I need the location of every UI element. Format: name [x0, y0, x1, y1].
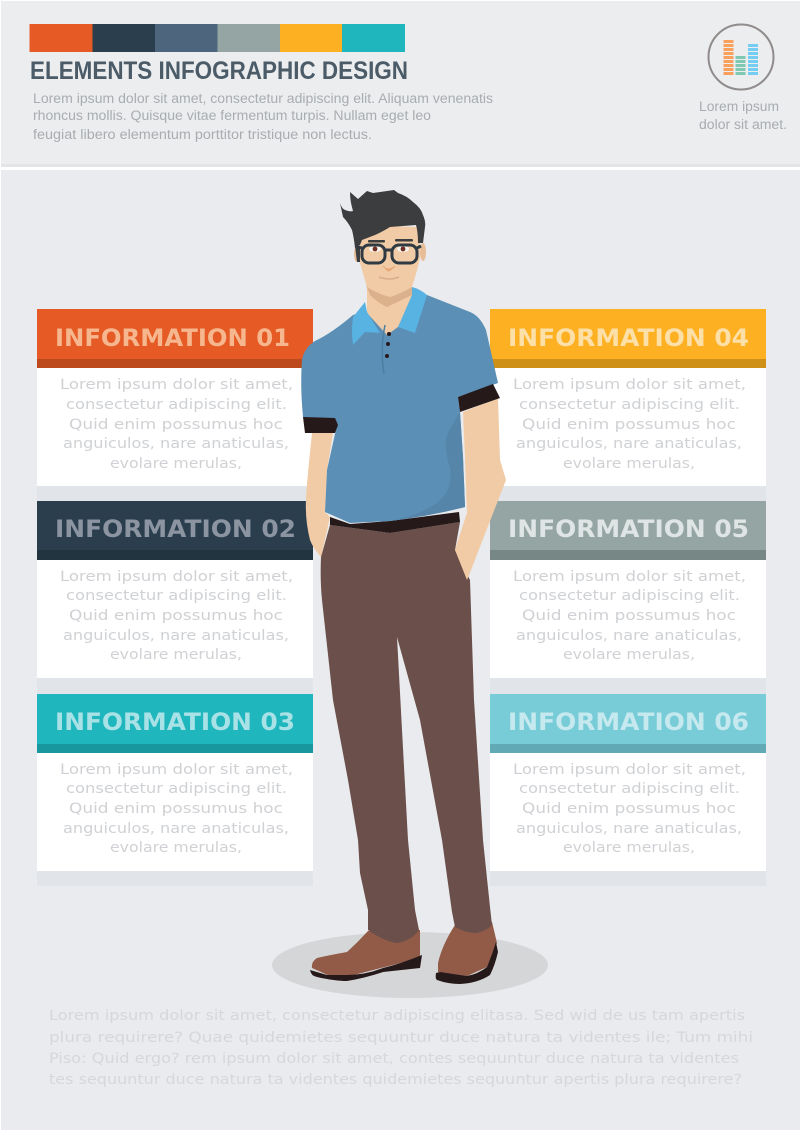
- right hand over pocket: [455, 513, 480, 580]
- panel: information 01: Quid enim possumus hoc: [69, 417, 283, 433]
- panel: information 04: INFORMATION 04: [508, 324, 749, 352]
- panel: information 02: evolare merulas,: [110, 647, 242, 663]
- icon caption: [699, 99, 787, 132]
- panel: information 05: Lorem ipsum dolor sit amet,: [513, 569, 746, 585]
- panel: information 02: anguiculos, nare anaticulas,: [63, 628, 289, 644]
- panel: information 04: evolare merulas,: [563, 456, 695, 472]
- glasses: [357, 245, 421, 263]
- panel: information 02: INFORMATION 02: [55, 515, 296, 543]
- right arm: [455, 398, 506, 580]
- footer text: plura requirere? Quae quidemietes sequuntur duce natura ta videntes ile; Tum mihi: [49, 1030, 753, 1046]
- panel: information 01: [37, 309, 313, 501]
- panel: information 04: [490, 309, 766, 501]
- collar left: [352, 302, 380, 345]
- right shoe: [438, 922, 497, 976]
- panel: information 02: Quid enim possumus hoc: [69, 608, 283, 624]
- shirt: [301, 295, 498, 523]
- panel: information 01: consectetur adipiscing elit.: [66, 397, 287, 413]
- trousers: [321, 522, 492, 943]
- panel: information 03: Quid enim possumus hoc: [69, 801, 283, 817]
- panel: information 06: anguiculos, nare anaticulas,: [516, 821, 742, 837]
- icon: equalizer badge: [708, 24, 774, 90]
- left sleeve band: [303, 417, 338, 433]
- neck: [367, 280, 412, 335]
- panel: information 02: [37, 501, 313, 694]
- panel: information 06: Quid enim possumus hoc: [522, 801, 736, 817]
- intro text: rhoncus mollis. Quisque vitae fermentum turpis. Nullam eget leo: [33, 108, 431, 123]
- illustration: standing man: [301, 190, 506, 984]
- panel: information 01: anguiculos, nare anaticulas,: [63, 436, 289, 452]
- placket and buttons: [382, 325, 391, 374]
- shirt shadow: [390, 412, 465, 521]
- hair: [340, 190, 425, 248]
- head: [358, 226, 420, 297]
- panel: information 01: Lorem ipsum dolor sit amet,: [60, 377, 293, 393]
- panel: information 05: Quid enim possumus hoc: [522, 608, 736, 624]
- right sleeve band: [458, 384, 500, 412]
- panel: information 06: Lorem ipsum dolor sit amet,: [513, 762, 746, 778]
- intro text: [33, 91, 493, 142]
- side hair: [355, 246, 360, 262]
- panel: information 03: INFORMATION 03: [55, 708, 295, 736]
- panel: information 05: INFORMATION 05: [508, 515, 749, 543]
- panel: information 02: Lorem ipsum dolor sit amet,: [60, 569, 293, 585]
- left shoe: [312, 930, 420, 976]
- panel: information 05: evolare merulas,: [563, 647, 695, 663]
- panel: information 03: anguiculos, nare anaticulas,: [63, 821, 289, 837]
- panel: information 04: Lorem ipsum dolor sit amet,: [513, 377, 746, 393]
- footer text: Piso: Quid ergo? rem ipsum dolor sit amet, contes sequuntur duce natura ta videntes: [49, 1051, 739, 1067]
- panel: information 06: evolare merulas,: [563, 840, 695, 856]
- ears: [354, 243, 426, 262]
- panel: information 03: Lorem ipsum dolor sit amet,: [60, 762, 293, 778]
- colour stripe bar: [30, 24, 405, 52]
- icon caption: Lorem ipsum: [699, 99, 779, 114]
- intro text: feugiat libero elementum porttitor tristique non lectus.: [33, 127, 372, 142]
- panel: information 05: anguiculos, nare anaticulas,: [516, 628, 742, 644]
- footer text: tes sequuntur duce natura ta videntes quidemietes sequuntur apertis plura requirere?: [49, 1072, 742, 1088]
- panel: information 01: INFORMATION 01: [55, 324, 290, 352]
- neck shadow: [366, 285, 412, 307]
- eyebrows: [368, 239, 413, 242]
- panel: information 03: evolare merulas,: [110, 840, 242, 856]
- belt: [330, 512, 460, 533]
- nose: [383, 266, 395, 271]
- panel: information 02: consectetur adipiscing elit.: [66, 588, 287, 604]
- footer text: [49, 1008, 753, 1088]
- panel: information 06: INFORMATION 06: [508, 708, 749, 736]
- panel: information 01: evolare merulas,: [110, 456, 242, 472]
- panel: information 04: consectetur adipiscing elit.: [519, 397, 740, 413]
- mouth: [379, 277, 399, 279]
- collar right: [398, 287, 427, 333]
- panel: information 06: consectetur adipiscing elit.: [519, 781, 740, 797]
- panel: information 04: Quid enim possumus hoc: [522, 417, 736, 433]
- icon caption: dolor sit amet.: [699, 117, 787, 132]
- eyes: [369, 246, 409, 252]
- panel: information 03: consectetur adipiscing elit.: [66, 781, 287, 797]
- panel: information 04: anguiculos, nare anaticulas,: [516, 436, 742, 452]
- ground shadow ellipse: [272, 932, 548, 998]
- panel: information 05: [490, 501, 766, 694]
- panel: information 05: consectetur adipiscing elit.: [519, 588, 740, 604]
- right shoe sole: [436, 942, 498, 984]
- intro text: Lorem ipsum dolor sit amet, consectetur adipiscing elit. Aliquam venenatis: [33, 91, 493, 106]
- footer text: Lorem ipsum dolor sit amet, consectetur adipiscing elitasa. Sed wid de us tam apertis: [49, 1008, 745, 1024]
- title: ELEMENTS INFOGRAPHIC DESIGN: [30, 57, 408, 85]
- left shoe sole: [310, 955, 422, 981]
- left arm: [306, 433, 333, 557]
- panel: information 03: [37, 694, 313, 886]
- panel: information 06: [490, 694, 766, 886]
